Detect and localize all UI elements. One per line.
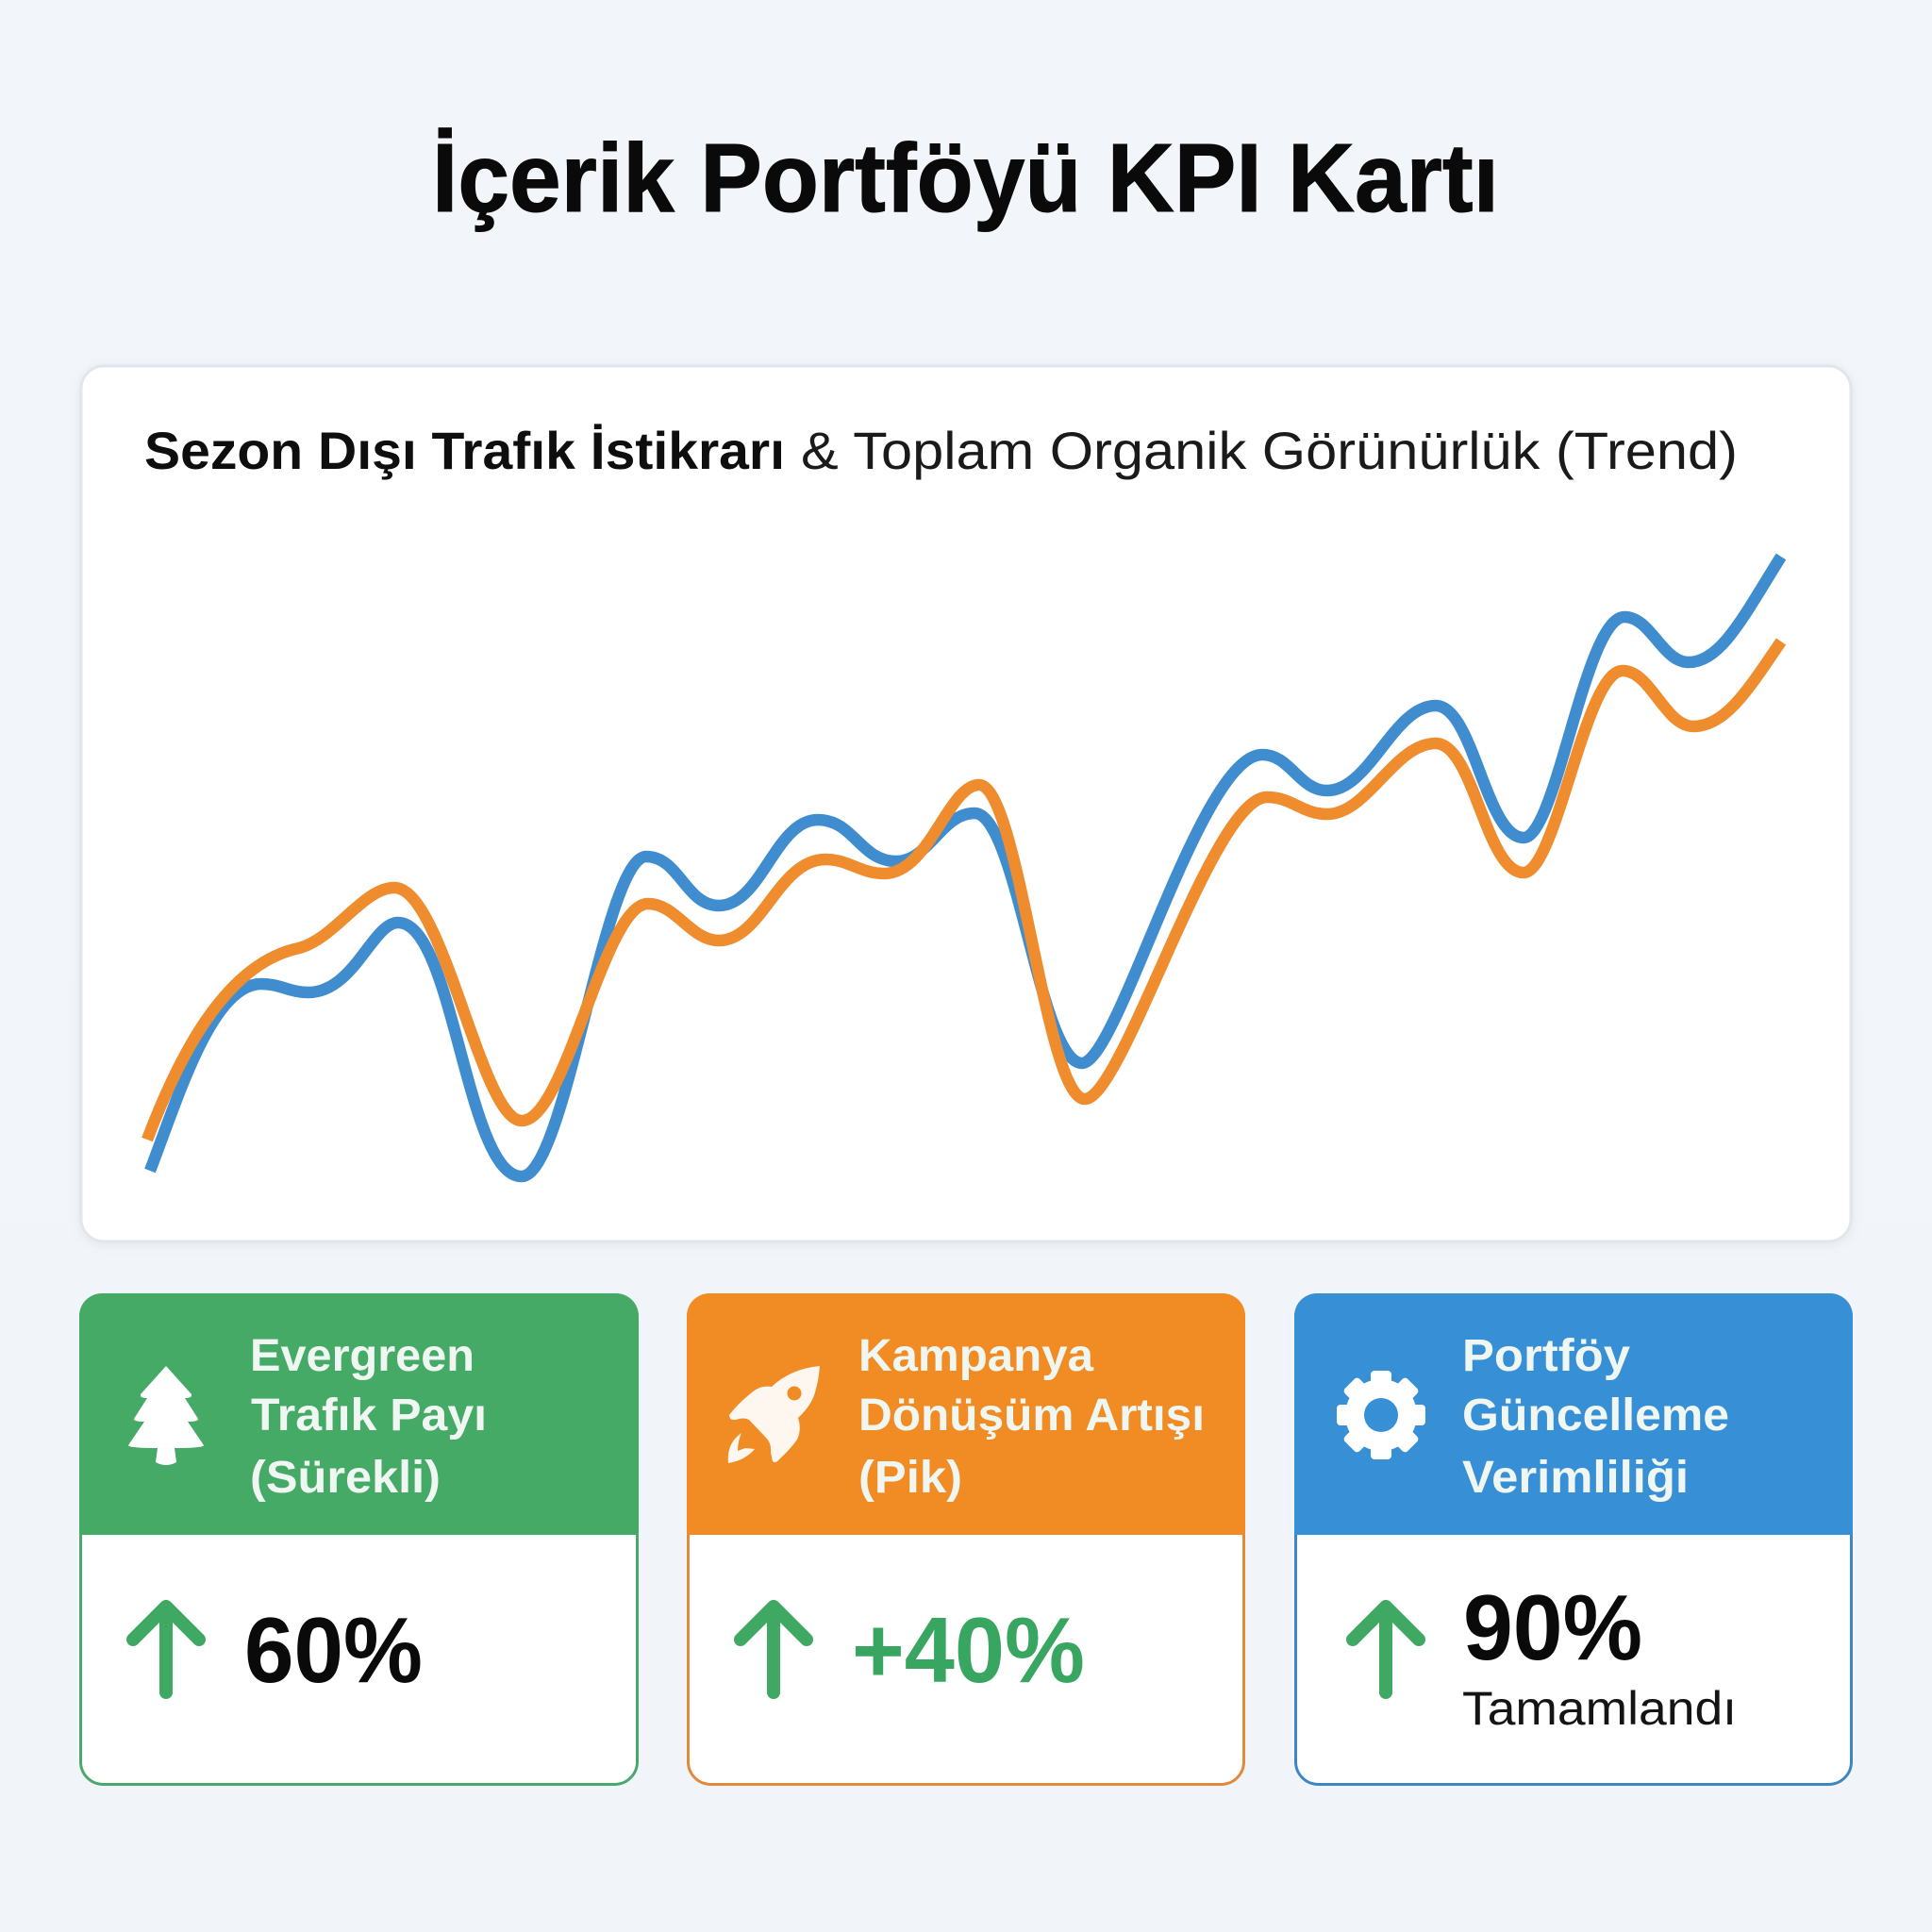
chart heading: & Toplam Organik Görünürlük (Trend) bbox=[801, 421, 1738, 480]
card label: Verimliliği bbox=[1462, 1453, 1689, 1503]
card header: green bbox=[79, 1293, 639, 1535]
title: İçerik Portföyü KPI Kartı bbox=[432, 124, 1499, 232]
card label: Dönüşüm Artışı bbox=[858, 1391, 1205, 1441]
card header: orange bbox=[687, 1293, 1245, 1535]
chart heading bbox=[144, 421, 1738, 480]
orange trend line bbox=[147, 641, 1781, 1140]
card header: blue bbox=[1294, 1293, 1853, 1535]
card label bbox=[250, 1331, 487, 1503]
panel: Kampanya KPI card bbox=[687, 1293, 1245, 1785]
KPI caption: Tamamlandı bbox=[1462, 1682, 1737, 1735]
blue trend line bbox=[150, 557, 1781, 1176]
icon: gear bbox=[1337, 1371, 1425, 1459]
card label bbox=[858, 1331, 1205, 1503]
KPI value: +40% bbox=[852, 1598, 1085, 1702]
card label: (Pik) bbox=[858, 1453, 962, 1503]
icon: up arrow bbox=[741, 1607, 807, 1692]
card label: Evergreen bbox=[250, 1331, 475, 1381]
panel: Portföy KPI card bbox=[1294, 1293, 1853, 1785]
KPI value: 90% bbox=[1463, 1575, 1642, 1679]
icon: up arrow bbox=[133, 1607, 199, 1692]
line chart: blue and orange trend lines bbox=[147, 557, 1781, 1176]
card label bbox=[1462, 1331, 1729, 1503]
panel: Evergreen KPI card bbox=[79, 1293, 639, 1785]
panel: trend chart bbox=[81, 366, 1851, 1241]
card label: (Sürekli) bbox=[250, 1453, 441, 1503]
chart heading: Sezon Dışı Trafık İstikrarı bbox=[144, 421, 785, 480]
card label: Güncelleme bbox=[1462, 1391, 1729, 1441]
card label: Portföy bbox=[1462, 1331, 1630, 1381]
card label: Trafık Payı bbox=[251, 1391, 487, 1441]
icon: up arrow bbox=[1353, 1607, 1419, 1692]
icon: evergreen tree bbox=[128, 1366, 204, 1465]
KPI value: 60% bbox=[244, 1598, 423, 1702]
icon: rocket bbox=[728, 1366, 820, 1463]
card label: Kampanya bbox=[858, 1331, 1093, 1381]
